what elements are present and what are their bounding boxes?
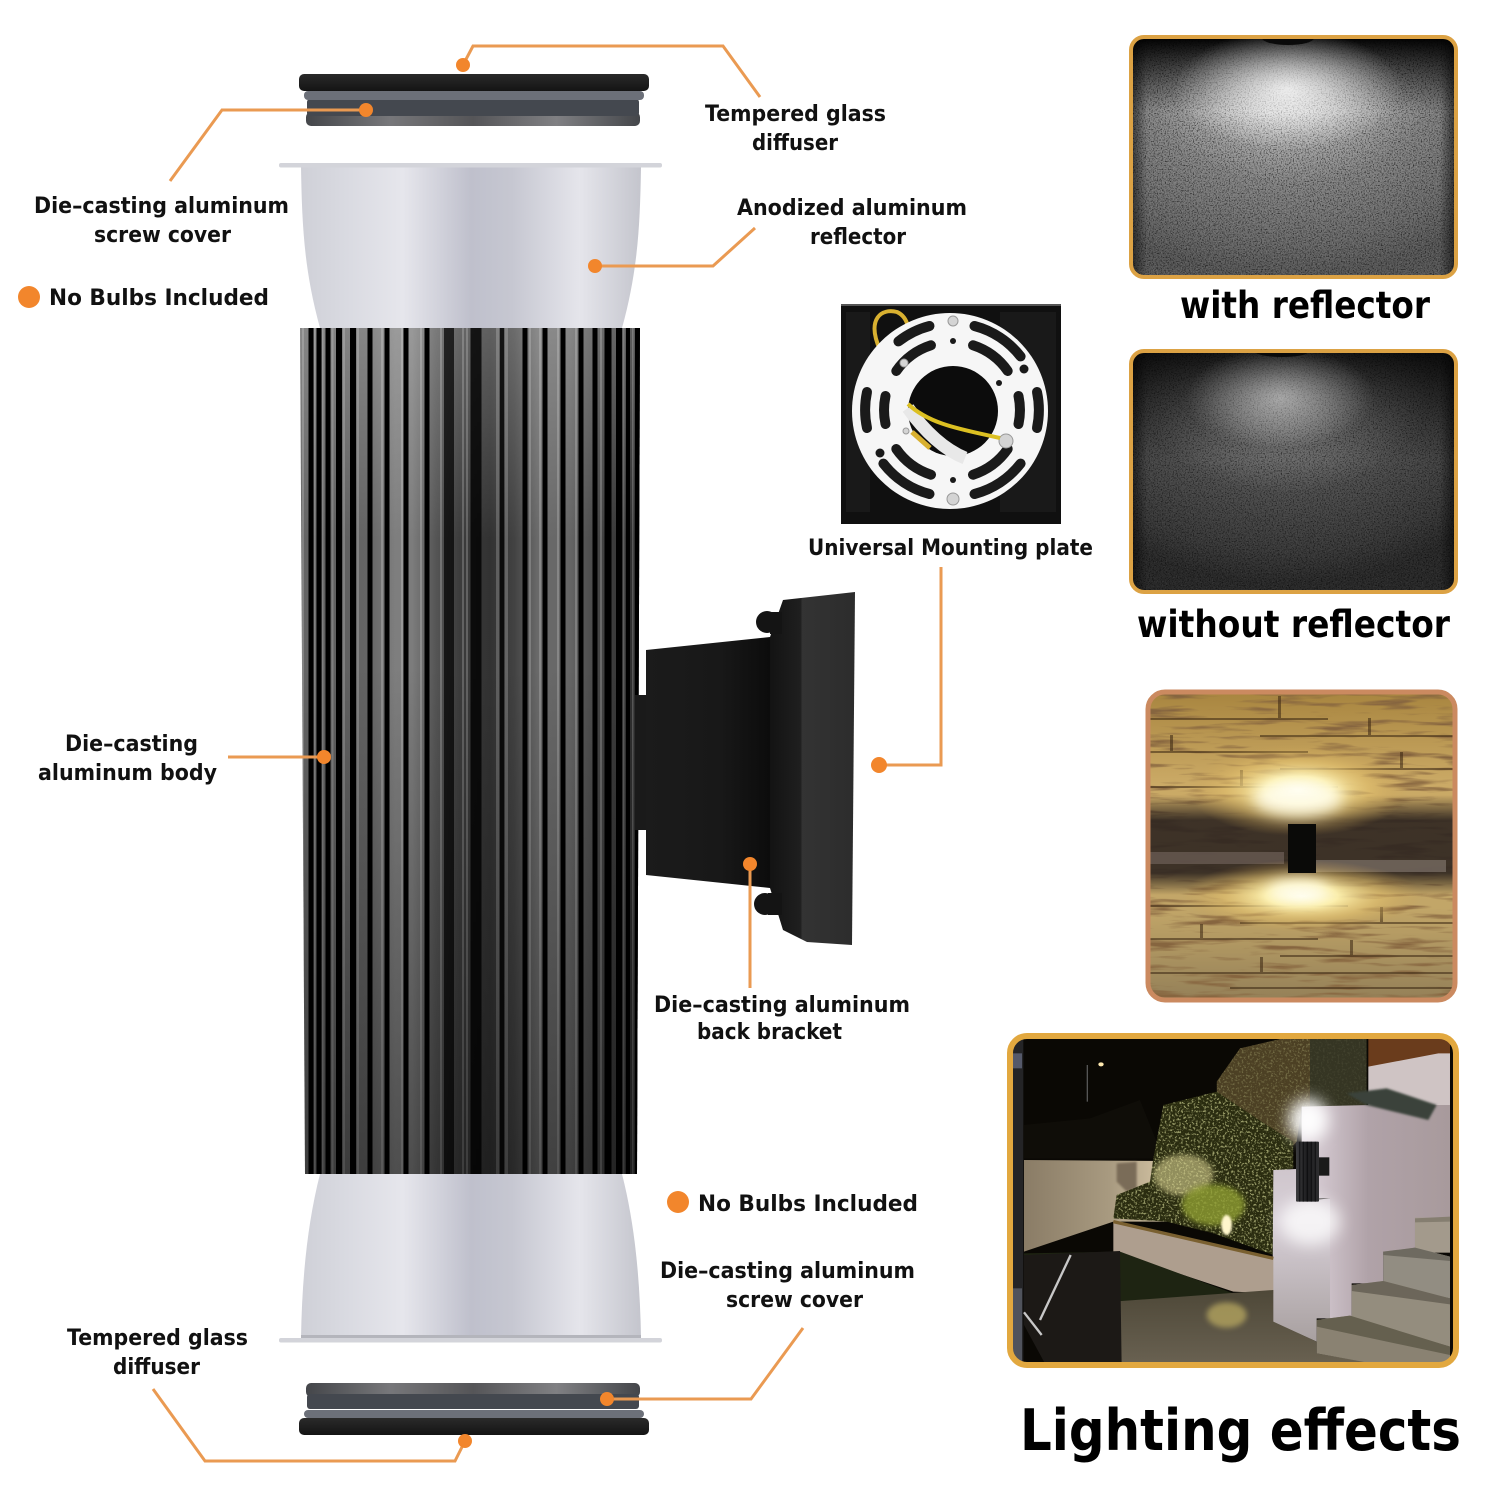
label: mounting plate: Universal Mounting plate [808,536,1093,561]
top tempered glass cap [299,74,649,126]
label: screw cover bottom: screw cover [726,1288,863,1313]
bottom tempered glass cap [299,1383,649,1435]
lamp on wall [1318,1157,1329,1176]
label: back bracket: back bracket [697,1020,842,1045]
callout dot: body [317,750,331,764]
callout line: mounting plate [879,567,941,765]
lamp glow [1288,1098,1328,1142]
bottom anodized reflector [279,1174,662,1342]
callout line: bottom glass diffuser [153,1389,465,1461]
callout dot: top screw cover [359,103,373,117]
label: tempered glass diffuser bottom: Tempered glass [67,1326,248,1351]
yellow wire loop [875,311,909,350]
rear white wall [1024,1160,1167,1252]
note: no bulbs bottom: No Bulbs Included [698,1192,918,1217]
upper wood cladding and white wall [1368,1038,1450,1067]
label: screw cover top: screw cover [94,223,231,248]
label: tempered glass diffuser bottom: diffuser [113,1355,200,1380]
caption: without reflector: without reflector [1137,603,1451,646]
label: back bracket: Die–casting aluminum [654,993,910,1018]
back bracket [635,592,855,945]
panel: exploded lamp diagram [279,74,855,1435]
top anodized reflector [279,163,662,328]
ribbed aluminum body [298,328,642,1174]
callout line: top screw cover [170,110,366,181]
label: screw cover bottom: Die–casting aluminum [660,1259,915,1284]
panel: universal mounting plate photo [841,304,1061,524]
paving [1120,1290,1364,1362]
main wall [1302,1105,1450,1318]
panel: warm light on stone wall [1148,692,1455,1000]
planter [1113,1222,1273,1293]
label: body: Die–casting [65,732,198,757]
chair [1024,1251,1122,1367]
brick wall [1216,1039,1367,1146]
caption: with reflector: with reflector [1180,284,1431,327]
column [1272,1169,1330,1342]
panel: photo with reflector [1131,30,1456,277]
label: tempered glass diffuser top: Tempered glass [705,102,886,127]
callout dot: bottom screw cover [600,1392,614,1406]
callout line: bottom screw cover [607,1328,803,1399]
lawn [1024,1252,1233,1302]
callout line: body [228,756,324,758]
panel: garden scene at night [1000,1025,1470,1375]
callout line: back bracket [748,864,752,988]
label: reflector: Anodized aluminum [737,196,967,221]
callout line: reflector [595,228,755,266]
label: body: aluminum body [38,761,217,786]
white mounting ring [852,313,1048,509]
panel: photo without reflector [1131,347,1456,592]
note: no bulbs top: No Bulbs Included [49,286,269,311]
callout line: top glass diffuser [463,46,760,97]
steps [1317,1217,1450,1367]
callout dot: bottom glass diffuser [458,1434,472,1448]
foliage [1110,1088,1297,1258]
label: screw cover top: Die–casting aluminum [34,194,289,219]
callout dot: reflector [588,259,602,273]
callout dot: back bracket [743,857,757,871]
wires through the centre [908,404,1000,458]
label: reflector: reflector [810,225,906,250]
callout dot: top glass diffuser [456,58,470,72]
callout dot: mounting plate [871,757,887,773]
lamp silhouette [1288,824,1316,873]
label: tempered glass diffuser top: diffuser [752,131,838,156]
